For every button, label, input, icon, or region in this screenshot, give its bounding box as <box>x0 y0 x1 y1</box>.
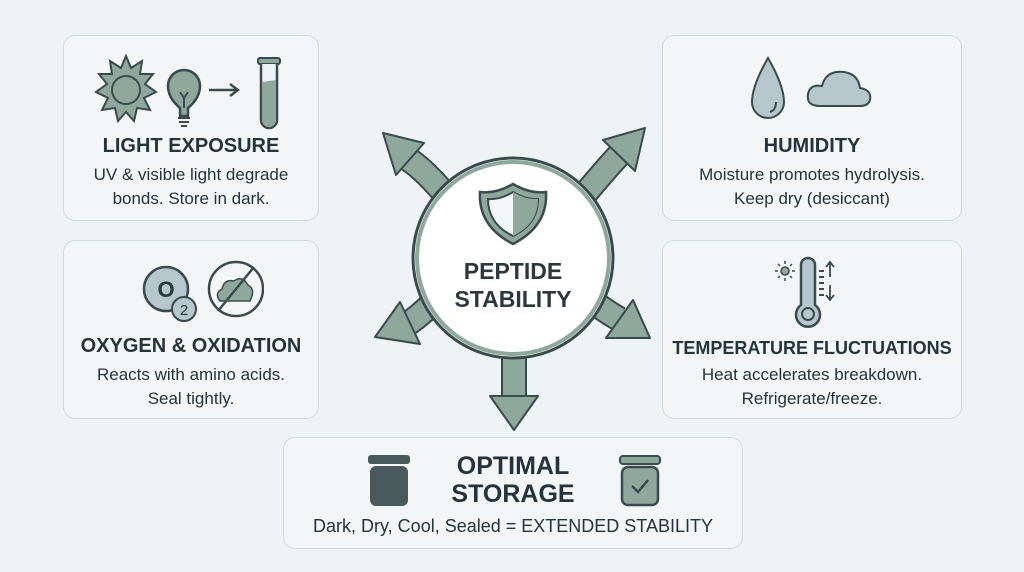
title: TEMPERATURE FLUCTUATIONS <box>672 338 952 358</box>
title: HUMIDITY <box>764 135 860 157</box>
title: STORAGE <box>451 480 575 508</box>
text <box>702 365 922 408</box>
text: Moisture promotes hydrolysis. <box>699 165 925 184</box>
text <box>94 165 288 208</box>
text: Heat accelerates breakdown. <box>702 365 922 384</box>
icons: O2 no-cloud <box>142 260 264 322</box>
panel: oxygen <box>63 240 319 419</box>
panel: humidity <box>662 35 962 221</box>
text: UV & visible light degrade <box>94 165 288 184</box>
text: Keep dry (desiccant) <box>734 189 890 208</box>
text <box>699 165 925 208</box>
title <box>451 452 575 508</box>
hub circle: STABILITY <box>454 286 572 312</box>
icons: O2 no-cloud: O <box>157 277 175 302</box>
title: LIGHT EXPOSURE <box>103 135 279 157</box>
panel: light exposure <box>63 35 319 221</box>
hub circle <box>413 158 613 358</box>
hub circle: PEPTIDE <box>464 258 562 284</box>
text: Seal tightly. <box>148 389 234 408</box>
icon: thermometer <box>775 256 835 328</box>
panel: optimal storage <box>283 437 743 549</box>
icons: O2 no-cloud: 2 <box>180 302 188 319</box>
text: Dark, Dry, Cool, Sealed = EXTENDED STABILITY <box>313 516 713 536</box>
panel: temperature <box>662 240 962 419</box>
text <box>97 365 285 408</box>
title: OXYGEN & OXIDATION <box>81 335 301 357</box>
text: Refrigerate/freeze. <box>742 389 882 408</box>
title: OPTIMAL <box>457 452 569 480</box>
icons: sun bulb arrow tube <box>94 54 281 130</box>
icons: drop cloud <box>751 56 872 119</box>
icon: dark jar <box>368 455 410 506</box>
text: bonds. Store in dark. <box>113 189 269 208</box>
icon: jar with check <box>619 455 661 506</box>
text: Reacts with amino acids. <box>97 365 285 384</box>
